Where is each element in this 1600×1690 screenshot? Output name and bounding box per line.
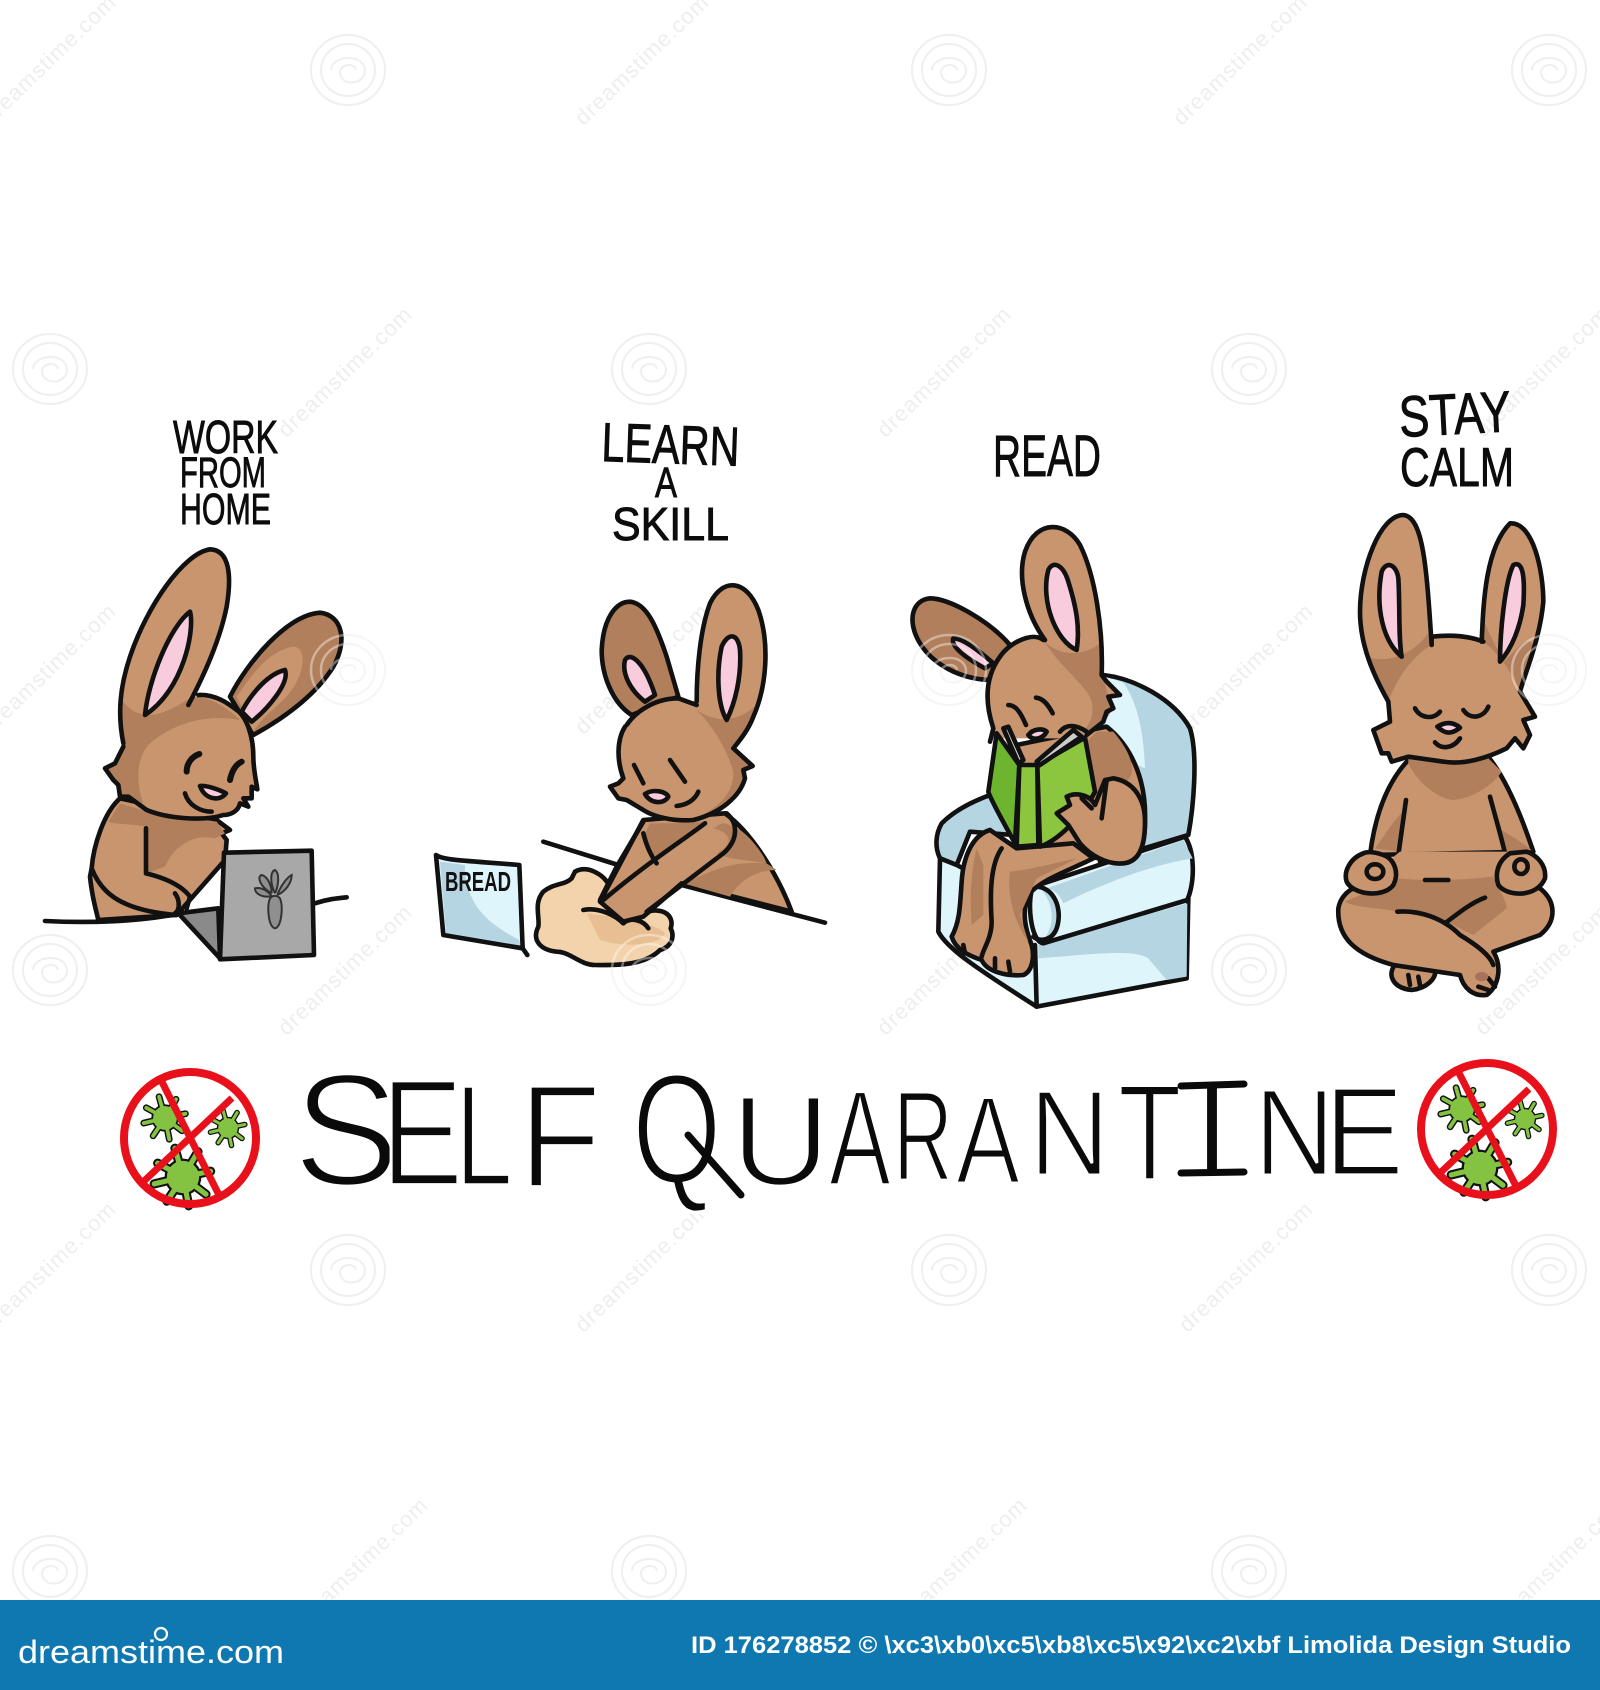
card label: BREAD: [445, 866, 511, 897]
rabbit: kneading bread: [436, 585, 825, 965]
left ear: [912, 598, 1010, 680]
label: stay calm: CALM: [1400, 436, 1514, 498]
face: [187, 754, 242, 780]
legs and feet: [952, 830, 1093, 975]
watermark pattern: dreamstime.com: [273, 899, 417, 1040]
label: work from home: FROM: [180, 449, 266, 497]
label: stay calm: STAY: [1397, 379, 1513, 450]
watermark pattern: dreamstime.com: [1174, 598, 1318, 739]
label: learn a skill: LEARN: [601, 411, 741, 478]
title: T: [1118, 1056, 1182, 1209]
body: [600, 813, 792, 922]
laptop: [178, 851, 314, 959]
watermark pattern: dreamstime.com: [872, 899, 1016, 1040]
label: work from home: [173, 411, 278, 534]
rabbit: working on laptop: [45, 549, 347, 959]
footer logo: dreamstime.com: [18, 1634, 284, 1670]
right ear: [230, 613, 341, 735]
face: [1008, 698, 1087, 732]
dough: [536, 869, 672, 965]
head and ears: [1360, 515, 1543, 763]
watermark pattern: dreamstime.com: [273, 301, 417, 442]
watermark pattern: dreamstime.com: [872, 301, 1016, 442]
icon: no virus left: [124, 1072, 256, 1206]
title: F: [519, 1053, 601, 1218]
title: S: [293, 1040, 400, 1219]
watermark highlights: [311, 635, 1586, 1005]
title: E: [381, 1049, 463, 1218]
armchair: [936, 675, 1194, 1007]
title: U: [731, 1070, 830, 1213]
label: learn a skill: A: [655, 459, 677, 507]
watermark pattern: dreamstime.com: [570, 598, 714, 739]
label: learn a skill: [601, 411, 741, 550]
carrot logo: [255, 870, 292, 928]
label: work from home: HOME: [180, 485, 271, 534]
label: learn a skill: SKILL: [612, 498, 729, 550]
table line: [45, 897, 347, 922]
label: stay calm: [1397, 379, 1514, 498]
legs: [1338, 852, 1552, 995]
title: I: [1192, 1056, 1232, 1204]
rabbit: reading in armchair: [912, 527, 1194, 1007]
title: N: [1029, 1065, 1110, 1201]
watermark pattern: dreamstime.com: [888, 1492, 1032, 1633]
face: [1415, 707, 1488, 747]
label: work from home: WORK: [173, 411, 278, 463]
head and left ear: [105, 549, 257, 819]
footer bar: [0, 1600, 1600, 1690]
title: L: [455, 1054, 513, 1216]
title: N: [1254, 1063, 1335, 1201]
label: read: READ: [993, 424, 1101, 489]
left hand: [1346, 852, 1396, 893]
icon: no virus right: [1421, 1063, 1553, 1197]
title: [293, 1040, 1404, 1219]
rabbit: meditating: [1338, 515, 1552, 995]
body and arm: [1000, 727, 1145, 863]
watermark pattern: dreamstime.com: [1174, 1196, 1318, 1337]
back foot: [1391, 965, 1435, 990]
body: [1370, 755, 1533, 855]
face: [634, 760, 698, 806]
reading hand: [1057, 778, 1145, 864]
title: Q: [632, 1042, 722, 1217]
table line: [543, 842, 825, 923]
head and right ear: [987, 527, 1120, 742]
right hand: [1497, 852, 1545, 894]
recipe card: [436, 855, 527, 955]
footer credit: ID 176278852 © \xc3\xb0\xc5\xb8\xc5\x92\xc2\xbf Limolida Design Studio: [691, 1632, 1571, 1659]
watermark pattern: dreamstime.com: [289, 1492, 433, 1633]
left ear: [602, 602, 678, 715]
title: E: [1324, 1061, 1404, 1203]
head and right ear: [610, 585, 765, 820]
book: [988, 727, 1095, 847]
title: A: [956, 1070, 1021, 1210]
title: R: [893, 1064, 953, 1207]
title: A: [829, 1062, 891, 1214]
watermark pattern: dreamstime.com: [570, 1196, 714, 1337]
body: [90, 798, 230, 920]
